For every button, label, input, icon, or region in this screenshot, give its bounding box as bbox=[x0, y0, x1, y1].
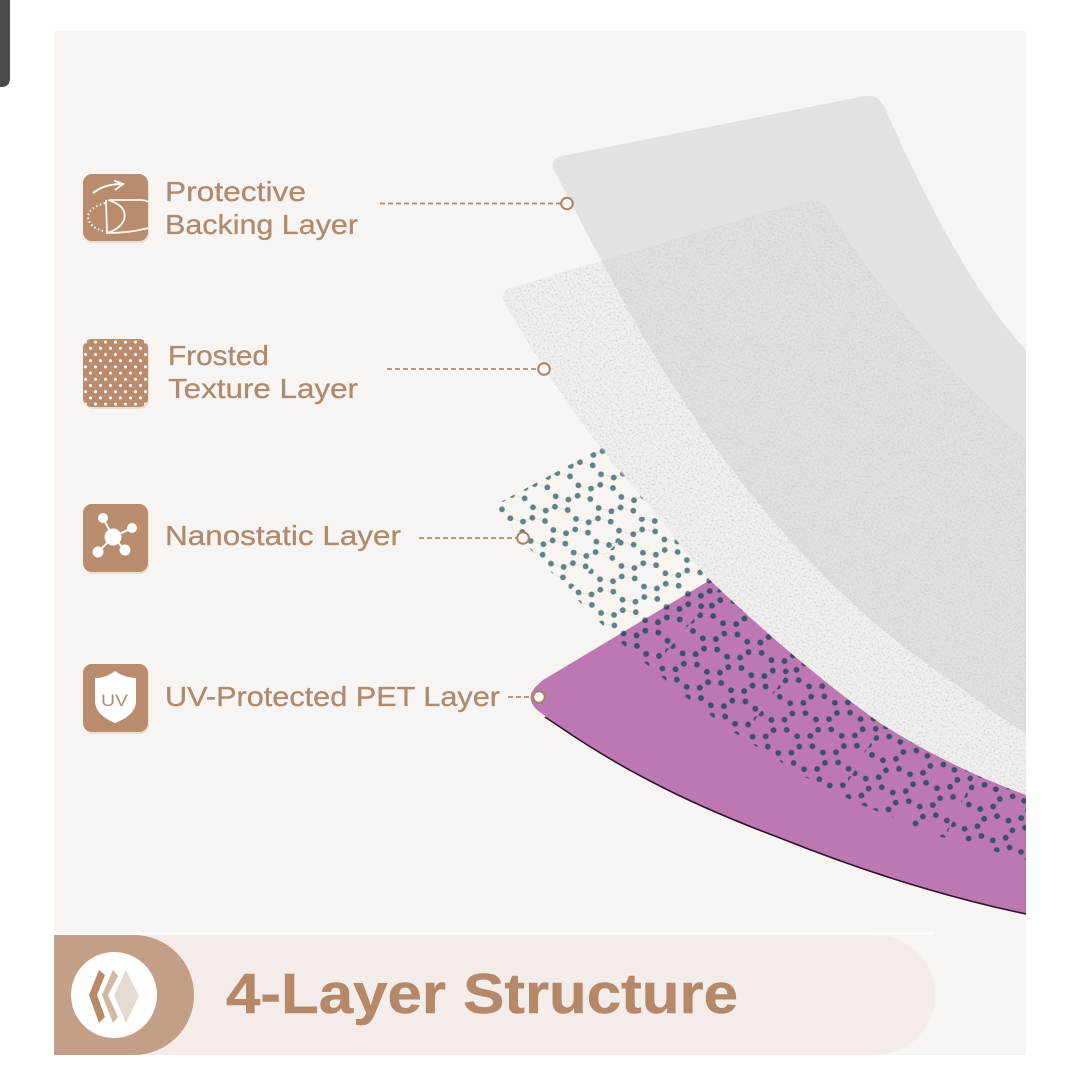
layer: frosted texture bbox=[503, 200, 1026, 795]
layer: protective backing bbox=[552, 96, 1026, 440]
text: Protective Backing Layer: Backing Layer bbox=[165, 209, 358, 240]
icon: molecule bbox=[83, 504, 149, 574]
text: Protective Backing Layer bbox=[165, 176, 358, 240]
layer: UV-protected PET bbox=[531, 580, 1026, 914]
text: Protective Backing Layer: Protective bbox=[165, 176, 306, 207]
text: Frosted Texture Layer bbox=[168, 340, 358, 404]
label: frosted texture layer bbox=[83, 339, 550, 409]
icon: UV shield bbox=[83, 664, 149, 734]
icon: frosted dots bbox=[83, 339, 149, 409]
connector: nanostatic bbox=[419, 532, 529, 544]
text: UV-Protected PET Layer: UV-Protected PET Layer bbox=[165, 681, 500, 712]
icon: layers badge bbox=[71, 952, 157, 1038]
layer stack illustration bbox=[490, 96, 1026, 914]
connector: protective backing bbox=[380, 198, 573, 209]
icon: UV shield: UV bbox=[101, 691, 129, 710]
screen corner fragment bbox=[0, 0, 10, 87]
heading: 4-Layer Structure bbox=[226, 962, 738, 1026]
text: Frosted Texture Layer: Frosted bbox=[168, 340, 269, 371]
text: Frosted Texture Layer: Texture Layer bbox=[168, 373, 358, 404]
connector: frosted texture bbox=[387, 363, 550, 375]
label: protective backing layer bbox=[83, 174, 573, 243]
layer: nanostatic lattice bbox=[490, 440, 1026, 870]
label: UV-protected PET layer bbox=[83, 664, 545, 734]
label: nanostatic layer bbox=[83, 504, 529, 574]
text: Nanostatic Layer: Nanostatic Layer bbox=[165, 520, 401, 551]
title bar bbox=[54, 932, 935, 1055]
connector: UV PET bbox=[508, 691, 545, 703]
icon: backing peel bbox=[83, 174, 149, 243]
